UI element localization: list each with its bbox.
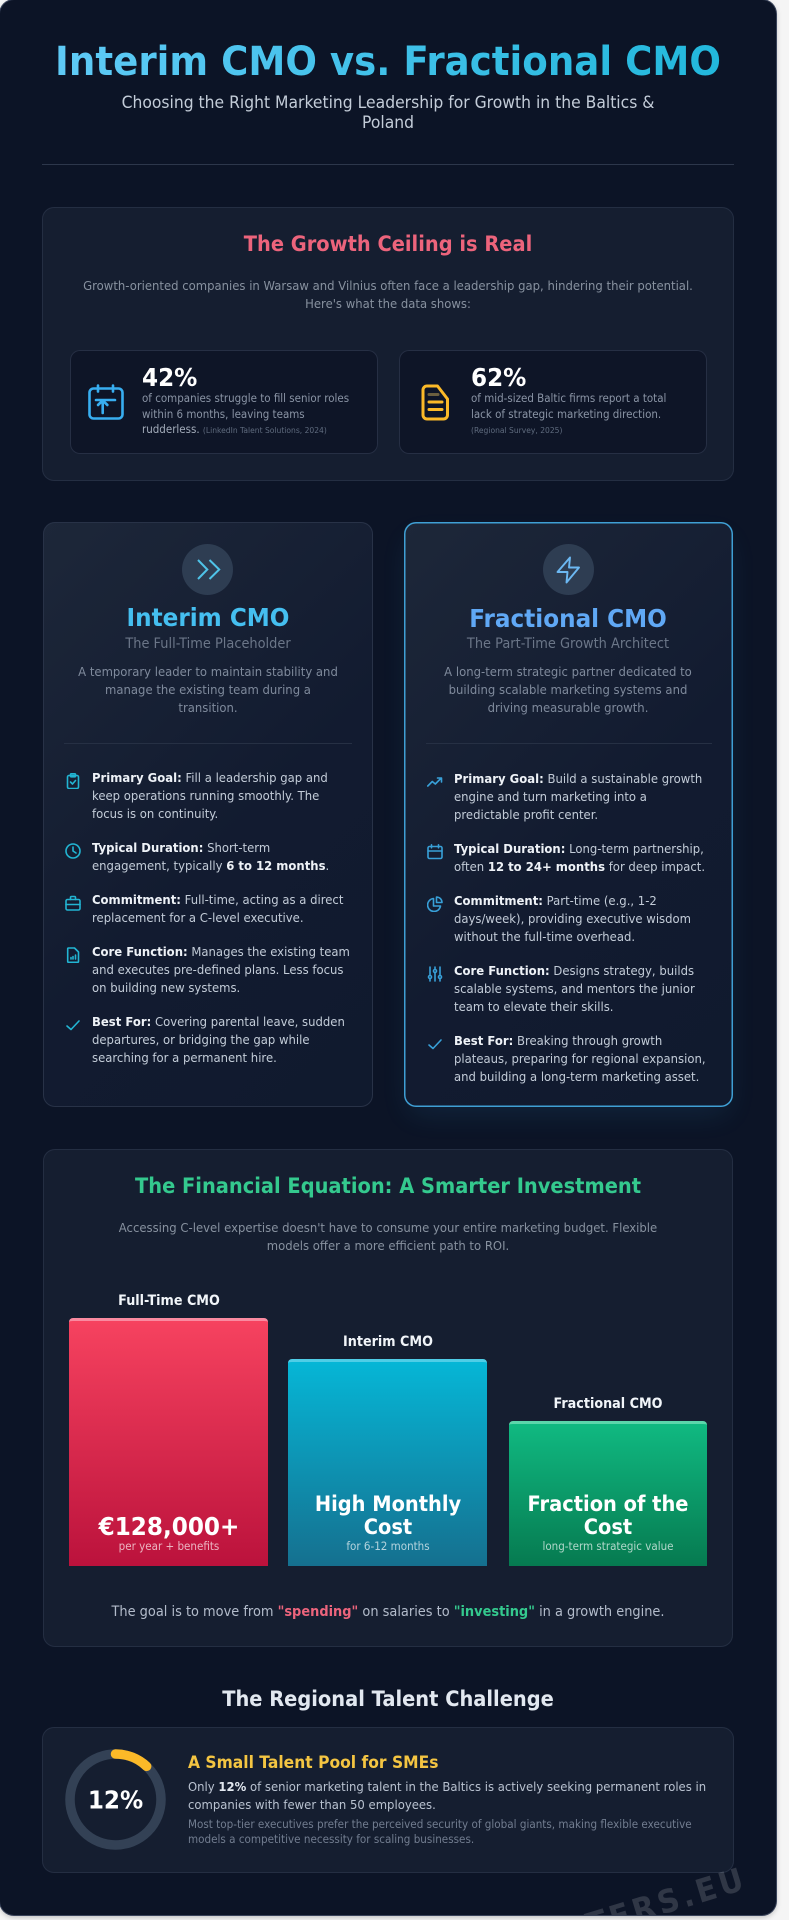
item text: predictable profit center. [454,806,598,822]
list item: typical duration [65,840,330,873]
stat description: (Regional Survey, 2025) [470,425,562,435]
callout text: companies with fewer than 50 employees. [188,1797,436,1812]
bar value: €128,000+ [98,1512,239,1541]
list item: best for [66,1014,345,1065]
bar label: interim: Interim CMO [343,1334,433,1350]
list item: core function [428,962,695,1014]
card description: manage the existing team during a [105,682,310,696]
item text: Primary Goal: Build a sustainable growth [454,770,703,786]
icon: briefcase [65,896,81,911]
bar: fractional CMO [508,1421,706,1566]
icon: chevrons [182,544,233,595]
card description: A long-term strategic partner dedicated to [444,664,692,679]
item text: Typical Duration: Short-term [92,840,271,855]
item text [454,892,691,944]
icon: report file [66,947,80,963]
stat card: 42% [70,350,378,454]
card description [78,664,337,714]
card description [444,664,692,715]
card title: Fractional CMO [469,604,667,632]
stat value: 62% [470,363,526,392]
bar note: long-term strategic value [542,1540,673,1553]
callout heading: A Small Talent Pool for SMEs [188,1752,438,1772]
icon: check [428,1039,442,1050]
item text: engagement, typically 6 to 12 months. [92,858,330,873]
item text: Commitment: Part-time (e.g., 1-2 [454,892,657,908]
list item: commitment [65,892,344,925]
item text: Commitment: Full-time, acting as a direct [92,892,344,907]
item text: Typical Duration: Long-term partnership, [454,840,704,856]
item text: replacement for a C-level executive. [92,910,304,925]
list item: primary goal [66,770,328,821]
item text [454,962,695,1014]
item text: plateaus, preparing for regional expansion, [454,1050,706,1066]
intro text [83,278,693,311]
card description: transition. [178,700,237,714]
item text: Core Function: Designs strategy, builds [454,962,694,978]
item text: often 12 to 24+ months for deep impact. [454,858,705,874]
callout note [188,1817,692,1848]
card description: driving measurable growth. [488,700,648,715]
panel: growth ceiling [42,207,734,481]
icon: sliders [428,966,442,982]
card subtitle: The Part-Time Growth Architect [467,636,669,652]
icon: clipboard [66,773,80,789]
subtitle: Choosing the Right Marketing Leadership for Growth in the Baltics & [122,92,654,112]
icon: document [422,384,449,420]
item text [92,1014,345,1065]
stat description: rudderless. (LinkedIn Talent Solutions, 2024) [142,423,326,436]
intro text: models offer a more efficient path to ROI. [267,1238,509,1253]
item text [454,1032,706,1084]
item text: without the full-time overhead. [454,928,635,944]
donut chart: 12% [65,1749,166,1850]
item text [92,944,350,995]
item text: team to elevate their skills. [454,998,614,1014]
bar value: Fraction of the [527,1492,688,1516]
item text: scalable systems, and mentors the junior [454,980,695,996]
stat description: within 6 months, leaving teams [142,408,304,420]
item text: departures, or bridging the gap while [92,1032,310,1047]
intro text: Accessing C-level expertise doesn't have to consume your entire marketing budget. Flexible [119,1220,657,1235]
panel: talent pool [42,1727,734,1873]
bar label: fractional: Fractional CMO [553,1396,662,1412]
item text [92,770,328,821]
closing statement: The goal is to move from "spending" on salaries to "investing" in a growth engine. [111,1604,665,1620]
item text [92,840,330,873]
intro text: Here's what the data shows: [305,296,471,311]
item text: on building new systems. [92,980,241,995]
heading: financial equation: The Financial Equation: A Smarter Investment [135,1174,641,1198]
card title: Interim CMO [126,603,289,632]
icon: trend up [427,777,442,787]
heading: regional talent: The Regional Talent Challenge [222,1687,554,1711]
item text: focus is on continuity. [92,806,219,821]
item text: searching for a permanent hire. [92,1050,277,1065]
list item: core function [66,944,350,995]
icon: clock [65,843,81,859]
callout text [188,1778,706,1814]
card subtitle: The Full-Time Placeholder [125,636,290,652]
item text [454,770,703,822]
item text: Best For: Breaking through growth [454,1032,663,1048]
item text: engine and turn marketing into a [454,788,647,804]
list item: typical duration [427,840,705,874]
subtitle [122,92,654,132]
callout note: models a competitive necessity for scaling businesses. [188,1833,474,1846]
panel: financial equation [43,1149,733,1646]
item text: keep operations running smoothly. The [92,788,320,803]
panel: fractional CMO [404,522,733,1107]
heading: growth ceiling: The Growth Ceiling is Real [244,232,532,256]
item text [92,892,344,925]
bar value: Cost [364,1515,412,1539]
icon: bolt [543,544,594,595]
stat description: lack of strategic marketing direction. [470,408,661,420]
intro text [119,1219,657,1255]
card description: A temporary leader to maintain stability and [78,664,337,678]
bar value [315,1493,461,1540]
item text: and executes pre-defined plans. Less focus [92,962,344,977]
item text: Core Function: Manages the existing team [92,944,350,959]
stat description [142,392,349,436]
bar value: Cost [583,1515,632,1539]
subtitle: Poland [362,112,414,132]
item text: Best For: Covering parental leave, sudden [92,1014,345,1029]
bar value [527,1493,688,1540]
stat description [470,392,666,435]
item text: days/week), providing executive wisdom [454,910,691,926]
bar: full-time CMO [69,1318,268,1566]
callout note: Most top-tier executives prefer the perceived security of global giants, making flexible executive [188,1818,692,1831]
list item: best for [428,1032,706,1084]
icon: calendar [427,844,443,860]
bar label: full-time: Full-Time CMO [118,1293,219,1309]
item text: and building a long-term marketing asset. [454,1068,700,1084]
list item: primary goal [427,770,703,822]
donut chart: 12%: 12% [88,1786,143,1815]
stat description: of companies struggle to fill senior roles [142,392,349,405]
stat value: 42% [142,363,197,392]
intro text: Growth-oriented companies in Warsaw and Vilnius often face a leadership gap, hindering their potential. [83,278,693,293]
item text [454,840,705,874]
icon: pie chart [427,896,443,912]
panel: interim CMO [43,522,373,1107]
list item: commitment [427,892,691,944]
card description: building scalable marketing systems and [449,682,687,697]
bar note: per year + benefits [118,1540,219,1553]
item text: Primary Goal: Fill a leadership gap and [92,770,328,785]
icon: check [66,1020,80,1030]
stat description: of mid-sized Baltic firms report a total [470,392,666,405]
stat card: 62% [398,350,706,454]
bar value: High Monthly [315,1492,461,1516]
bar: interim CMO [288,1359,487,1566]
icon: calendar [88,384,124,420]
title: Interim CMO vs. Fractional CMO [55,39,721,85]
bar note: for 6-12 months [346,1540,429,1553]
callout text: Only 12% of senior marketing talent in the Baltics is actively seeking permanent roles in [188,1779,706,1794]
